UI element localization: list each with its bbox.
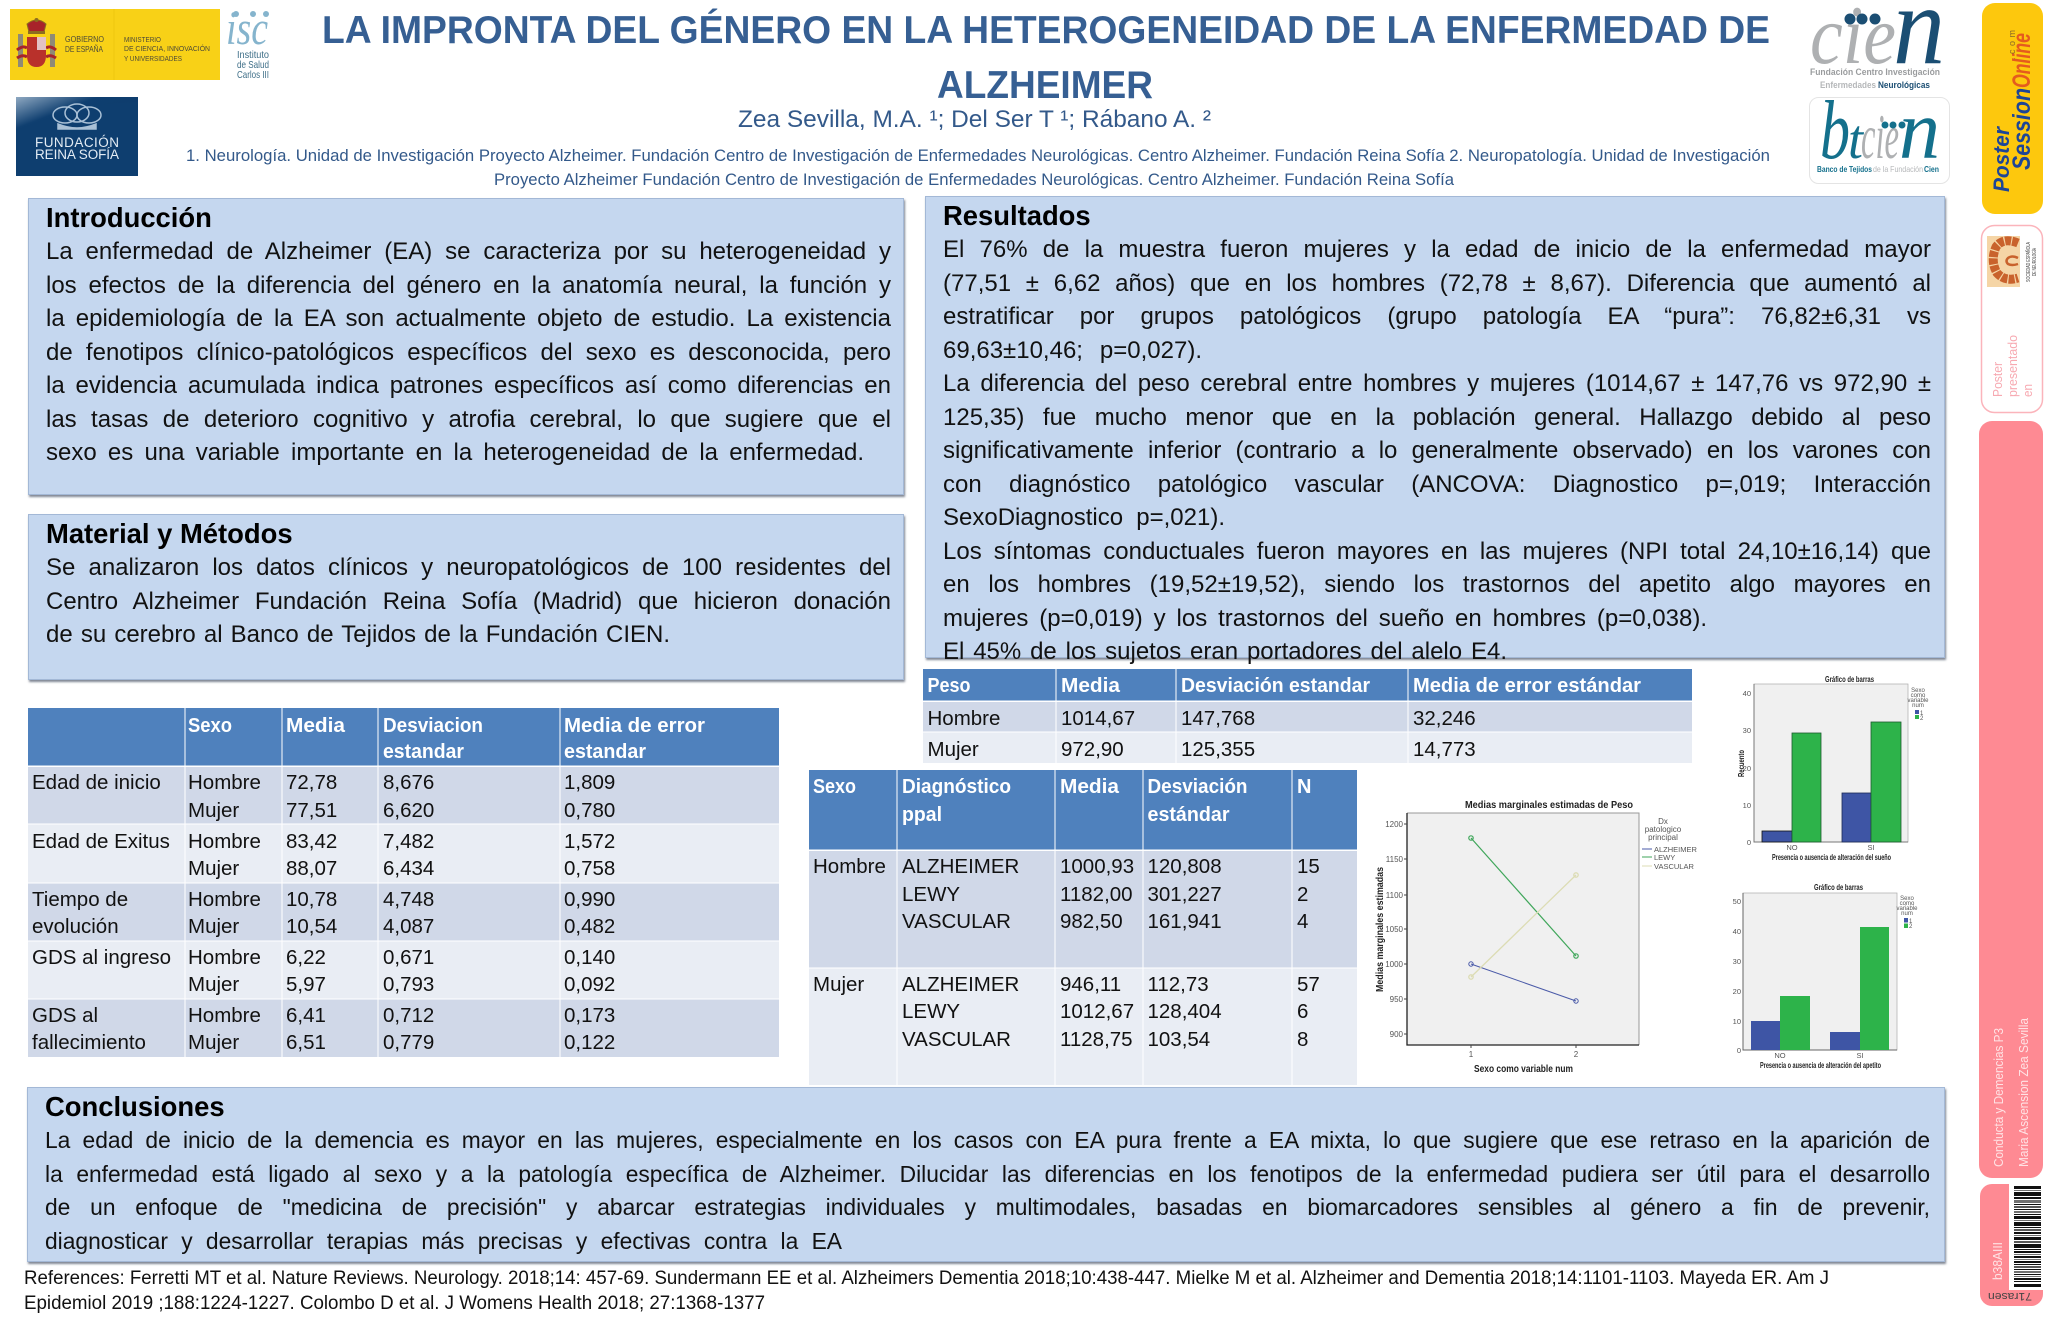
table: brain weight by sex: 32,246 [1413,707,1476,730]
sidebar: Poster presentado en: DE NEUROLOGÍA [2031,248,2038,276]
table: brain weight by sex and pathological diagnosis: 4 [1297,910,1308,933]
logo: Fundación Reina Sofía [16,97,138,176]
affiliations: 1. Neurología. Unidad de Investigación Proyecto Alzheimer. Fundación Centro de Investigación de Enfermedades Neurológicas. Centro Alzheimer. Fundación Reina Sofía 2. Neuropatología. Unidad de Investigación [186,147,1770,165]
legend: Sexo [1900,896,1914,902]
bar chart: appetite disturbance by sex: 50 [1733,897,1741,906]
text block: Introducción [46,238,891,466]
bar chart: sleep disturbance by sex [1737,675,1929,862]
line chart: estimated marginal means of brain weight: 1100 [1386,891,1404,900]
logo: Banco de Tejidos btcien: t [1848,109,1864,171]
bar chart: sleep disturbance by sex: Recuento [1737,750,1746,777]
legend: Dx [1658,817,1668,826]
bar chart: appetite disturbance by sex [1733,883,1918,1070]
table: brain weight by sex and pathological diagnosis: LEWY [902,1000,960,1023]
table: brain weight by sex and pathological diagnosis: VASCULAR [902,1028,1011,1051]
text block: Introducción: la epidemiología de la EA son actualmente objeto de estudio. La existencia [46,305,891,332]
line chart: estimated marginal means of brain weight: Sexo como variable num [1474,1064,1573,1075]
logo: Banco de Tejidos btcien [1810,84,1950,184]
legend: 2 [1909,924,1913,930]
table: brain weight by sex and pathological diagnosis: 15 [1297,855,1320,878]
table: brain weight by sex and pathological diagnosis: 128,404 [1148,1000,1222,1023]
legend: como [1900,901,1915,907]
logo: Banco de Tejidos btcien: Cien [1924,164,1939,174]
legend [1896,896,1918,930]
line chart: estimated marginal means of brain weight: 900 [1390,1030,1404,1039]
table: demographic and clinical variables by sex: Mujer [188,799,239,822]
table: demographic and clinical variables by sex: 0,122 [564,1031,615,1054]
table: brain weight by sex and pathological diagnosis: 1000,93 [1060,855,1134,878]
title: LA IMPRONTA DEL GÉNERO EN LA HETEROGENEIDAD DE LA ENFERMEDAD DE [322,8,1770,52]
table: demographic and clinical variables by sex: 4,748 [383,888,434,911]
table: brain weight by sex: Desviación estandar [1181,675,1370,697]
legend: num [1912,703,1924,709]
sidebar: Poster presentado en: Poster [1990,361,2005,397]
table: brain weight by sex and pathological diagnosis: 1128,75 [1060,1028,1133,1051]
table: brain weight by sex: Hombre [928,707,1000,730]
table: demographic and clinical variables by sex: Mujer [188,857,239,880]
barcode [2014,1186,2041,1287]
table: demographic and clinical variables by sex: Hombre [188,830,261,853]
text block: Resultados: significativamente inferior (contrario a lo generalmente observado) en los varones con [943,437,1931,464]
table: brain weight by sex and pathological diagnosis: estándar [1148,804,1230,826]
table: demographic and clinical variables by sex: Hombre [188,888,261,911]
text block: Conclusiones: la enfermedad está ligado al sexo y a la patología específica de Alzheimer. Dilucidar las diferencias en los fenotipos de la enfermedad pudiera ser útil para el desarrollo [45,1161,1930,1187]
text block: Resultados: La diferencia del peso cerebral entre hombres y mujeres (1014,67 ± 147,76 vs 972,90 ± [943,370,1931,397]
table: demographic and clinical variables by sex: Sexo [188,715,232,737]
references [24,1268,1829,1314]
heading: Material y Métodos: Material y Métodos [46,518,293,548]
panel: Conclusiones [27,1087,1945,1262]
logo: Fundación CIEN: Neurológicas [1878,80,1930,91]
legend: LEWY [1654,853,1675,862]
legend: Sexo [1911,688,1925,694]
table: demographic and clinical variables by sex: fallecimiento [32,1031,146,1054]
bar chart: sleep disturbance by sex: 10 [1743,801,1751,810]
bar chart: appetite disturbance by sex: 10 [1733,1017,1741,1026]
table: brain weight by sex and pathological diagnosis: 301,227 [1148,883,1222,906]
table: brain weight by sex and pathological diagnosis: Diagnóstico [902,776,1011,798]
panel: Resultados [925,196,1945,658]
table: demographic and clinical variables by sex: 10,78 [286,888,337,911]
text block: Conclusiones: de un enfoque de "medicina de precisión" y abarcar estrategias individuales y multimodales, basadas en biomarcadores sensibles al género a fin de prevenir, [45,1194,1930,1220]
line chart: estimated marginal means of brain weight: 1000 [1385,960,1404,969]
bar chart: sleep disturbance by sex: 30 [1743,726,1751,735]
table: brain weight by sex and pathological diagnosis: 6 [1297,1000,1308,1023]
table: demographic and clinical variables by sex: 5,97 [286,973,326,996]
icon: crown [53,104,101,129]
table: brain weight by sex: 1014,67 [1061,707,1135,730]
heading: Introducción: Introducción [46,202,212,232]
legend: variable [1896,906,1918,912]
table: brain weight by sex and pathological diagnosis: 946,11 [1060,973,1121,996]
table: demographic and clinical variables by sex: 0,173 [564,1004,615,1027]
table: demographic and clinical variables by sex: 88,07 [286,857,337,880]
series: Lewy [1469,836,1578,958]
legend: VASCULAR [1654,862,1694,871]
table: demographic and clinical variables by sex: Hombre [188,771,261,794]
bar chart: appetite disturbance by sex: SI [1856,1051,1864,1060]
table: demographic and clinical variables by sex: Edad de inicio [32,771,161,794]
table: demographic and clinical variables by sex: Mujer [188,1031,239,1054]
table: demographic and clinical variables by sex: Hombre [188,1004,261,1027]
legend: 1 [1909,919,1913,925]
table: demographic and clinical variables by sex [28,708,779,1057]
table: brain weight by sex: Media de error estándar [1413,675,1641,697]
table: demographic and clinical variables by sex: GDS al ingreso [32,946,171,969]
panel: Introducción [28,198,904,495]
table: demographic and clinical variables by sex: 1,572 [564,830,615,853]
table: demographic and clinical variables by sex: 83,42 [286,830,337,853]
table: brain weight by sex and pathological diagnosis: Sexo [813,776,856,798]
table: brain weight by sex and pathological diagnosis [809,770,1357,1085]
table: demographic and clinical variables by sex: 10,54 [286,915,337,938]
legend: 2 [1920,716,1924,722]
table: demographic and clinical variables by sex: Tiempo de [32,888,128,911]
bar chart: sleep disturbance by sex: 40 [1743,689,1751,698]
logo: Gobierno de España, Ministerio: MINISTERIO [124,35,161,44]
sidebar: session and author tab: Maria Ascension Zea Sevilla [2016,1017,2031,1167]
table: brain weight by sex and pathological diagnosis: Hombre [813,855,886,878]
logo: Fundación Reina Sofía: FUNDACIÓN [35,135,119,150]
sidebar: Poster presentado en: SOCIEDAD ESPAÑOLA [2025,242,2032,282]
table: demographic and clinical variables by sex: 7,482 [383,830,434,853]
logo: Banco de Tejidos btcien: b [1820,84,1850,177]
line chart: estimated marginal means of brain weight: 950 [1390,995,1404,1004]
bar chart: sleep disturbance by sex: NO [1786,843,1798,852]
text block: Resultados: SexoDiagnostico p=,021). [943,504,1225,531]
text block: Material y Métodos: de su cerebro al Banco de Tejidos de la Fundación CIEN. [46,621,670,648]
bar chart: sleep disturbance by sex: 20 [1743,764,1751,773]
table: brain weight by sex and pathological diagnosis: VASCULAR [902,910,1011,933]
heading: Resultados: Resultados [943,200,1091,230]
table: demographic and clinical variables by sex: 0,140 [564,946,615,969]
table: demographic and clinical variables by sex: 0,793 [383,973,434,996]
logo: Gobierno de España, Ministerio: Y UNIVERSIDADES [124,54,182,63]
table: brain weight by sex and pathological diagnosis: Media [1060,776,1120,798]
line chart: estimated marginal means of brain weight: 1150 [1386,855,1404,864]
bar chart: sleep disturbance by sex: Gráfico de barras [1825,675,1874,684]
sidebar: PosterSessionOnline badge: Poster [1989,126,2014,192]
sidebar: barcode tab [1980,1184,2043,1306]
legend: 1 [1920,711,1924,717]
table: brain weight by sex and pathological diagnosis: 8 [1297,1028,1308,1051]
authors: Zea Sevilla, M.A. ¹; Del Ser T ¹; Rábano A. ² [738,106,1211,133]
table: demographic and clinical variables by sex: 0,990 [564,888,615,911]
sidebar: PosterSessionOnline badge: Session [2008,88,2036,170]
table: brain weight by sex and pathological diagnosis: 1182,00 [1060,883,1133,906]
text block: Resultados: El 76% de la muestra fueron mujeres y la edad de inicio de la enfermedad mayor [943,236,1931,263]
table: demographic and clinical variables by sex: 0,482 [564,915,615,938]
table: brain weight by sex: Mujer [928,738,979,761]
table: brain weight by sex and pathological diagnosis: ALZHEIMER [902,855,1019,878]
table: brain weight by sex: 125,355 [1181,738,1255,761]
sidebar: Poster presentado en: en [2020,384,2035,397]
bar chart: sleep disturbance by sex: SI [1867,843,1875,852]
table: brain weight by sex and pathological diagnosis: Mujer [813,973,864,996]
bar chart: sleep disturbance by sex: 0 [1747,838,1751,847]
table: demographic and clinical variables by sex: Mujer [188,973,239,996]
references: Epidemiol 2019 ;188:1224-1227. Colombo D et al. J Womens Health 2018; 27:1368-1377 [24,1293,765,1314]
text block: Resultados: mujeres (p=0,019) y los trastornos del sueño en hombres (p=0,038). [943,604,1707,632]
text block: Resultados: (77,51 ± 6,62 años) que en los hombres (72,78 ± 8,67). Diferencia que aumentó al [943,270,1931,296]
logo: Banco de Tejidos btcien: Banco de Tejidos [1817,164,1872,174]
text block: Introducción: de fenotipos clínico-patológicos específicos del sexo es desconocida, pero [46,338,891,366]
text block: Resultados: 69,63±10,46; p=0,027). [943,336,1202,364]
bar chart: appetite disturbance by sex: Presencia o ausencia de alteración del apetito [1760,1061,1881,1070]
series: Alzheimer [1469,962,1578,1003]
logo: Banco de Tejidos btcien: de la Fundación [1873,164,1923,174]
table: demographic and clinical variables by sex: 0,758 [564,857,615,880]
text block: Introducción: la evidencia acumulada indica patrones específicos así como diferencias en [46,372,891,399]
table: brain weight by sex: 972,90 [1061,738,1124,761]
table: demographic and clinical variables by sex: Hombre [188,946,261,969]
sidebar: Poster presentado en [1982,226,2042,412]
affiliations: Proyecto Alzheimer Fundación Centro de Investigación de Enfermedades Neurológicas. Centro Alzheimer. Fundación Reina Sofía [494,171,1455,189]
table: brain weight by sex: Peso [928,675,970,697]
legend [1642,817,1698,871]
sidebar: barcode tab: 71rasen [1988,1290,2032,1302]
text block: Material y Métodos [46,554,891,648]
table: brain weight by sex and pathological diagnosis: 112,73 [1148,973,1209,996]
text block: Conclusiones: La edad de inicio de la demencia es mayor en las mujeres, especialmente en los casos con EA pura frente a EA mixta, lo que sugiere que ese retraso en la aparición de [45,1127,1930,1153]
text block: Resultados: en los hombres (19,52±19,52), siendo los trastornos del apetito algo mayores en [943,571,1931,598]
line chart: estimated marginal means of brain weight: 1050 [1385,925,1404,934]
table: brain weight by sex and pathological diagnosis: 1012,67 [1060,1000,1134,1023]
table: brain weight by sex: 147,768 [1181,707,1255,730]
text block: Resultados: El 45% de los sujetos eran portadores del alelo E4. [943,638,1507,665]
logo: Instituto de Salud Carlos III: Carlos III [237,69,269,81]
text block: Resultados [943,236,1931,665]
legend: principal [1648,833,1678,842]
table: demographic and clinical variables by sex: Media de error [564,715,705,737]
panel: Material y Métodos [28,514,904,680]
table: demographic and clinical variables by sex: 77,51 [286,799,337,822]
table: demographic and clinical variables by sex: GDS al [32,1004,98,1027]
table: demographic and clinical variables by sex: 4,087 [383,915,434,938]
title [322,8,1770,107]
logo: Banco de Tejidos btcien: cie [1861,101,1899,172]
sidebar: session and author tab [1979,421,2043,1178]
sidebar: session and author tab: Conducta y Demencias P3 [1991,1028,2006,1167]
icon: brain logo [1987,236,2020,287]
text block: Conclusiones [45,1127,1930,1254]
title: ALZHEIMER [937,64,1153,107]
table: brain weight by sex: Media [1061,675,1121,697]
bar chart: sleep disturbance by sex: Presencia o ausencia de alteración del sueño [1772,853,1891,862]
logo: Banco de Tejidos btcien: n [1899,84,1940,177]
line chart: estimated marginal means of brain weight: Medias marginales estimadas de Peso [1465,800,1633,811]
table: brain weight by sex and pathological diagnosis: 57 [1297,973,1320,996]
text block: Material y Métodos: Centro Alzheimer Fundación Reina Sofía (Madrid) que hicieron donación [46,588,891,614]
table: demographic and clinical variables by sex: 6,41 [286,1004,326,1027]
table: demographic and clinical variables by sex: 0,780 [564,799,615,822]
text block: Introducción: sexo es una variable importante en la heterogeneidad de la enfermedad. [46,439,864,466]
text block: Resultados: Los síntomas conductuales fueron mayores en las mujeres (NPI total 24,10±16,14) que [943,538,1931,564]
logo: Fundación Reina Sofía: REINA SOFÍA [35,147,119,162]
legend: patologico [1645,825,1682,834]
logo: Gobierno de España, Ministerio: DE ESPAÑA [65,45,104,54]
text block: Material y Métodos: Se analizaron los datos clínicos y neuropatológicos de 100 residentes del [46,554,891,581]
table: demographic and clinical variables by sex: Media [286,715,346,737]
table: brain weight by sex and pathological diagnosis: 2 [1297,883,1308,906]
text block: Introducción: las tasas de deterioro cognitivo y atrofia cerebral, lo que sugiere que el [46,406,891,432]
table: demographic and clinical variables by sex: evolución [32,915,119,938]
legend: como [1911,693,1926,699]
logo: Fundación CIEN: Enfermedades [1820,80,1876,91]
table: brain weight by sex and pathological diagnosis: 103,54 [1148,1028,1210,1051]
text block: Resultados: con diagnóstico patológico vascular (ANCOVA: Diagnostico p=,019; Interacción [943,470,1931,498]
table: demographic and clinical variables by sex: Desviacion [383,715,483,737]
table: demographic and clinical variables by sex: 0,712 [383,1004,434,1027]
legend: ALZHEIMER [1654,845,1698,854]
bar chart: appetite disturbance by sex: 30 [1733,957,1741,966]
legend: num [1901,911,1913,917]
table: brain weight by sex [923,669,1692,763]
references: References: Ferretti MT et al. Nature Reviews. Neurology. 2018;14: 457-69. Sundermann EE et al. Alzheimers Dementia 2018;10:438-447. Mielke M et al. Alzheimer and Dementia 2018;14:1101-1103. Mayeda ER. Am J [24,1268,1829,1289]
sidebar: PosterSessionOnline badge: .com [2007,30,2017,60]
table: brain weight by sex and pathological diagnosis: ppal [902,804,942,826]
table: demographic and clinical variables by sex: 6,434 [383,857,434,880]
table: demographic and clinical variables by sex: 72,78 [286,771,337,794]
affiliations [186,147,1770,189]
line chart: estimated marginal means of brain weight: 1 [1469,1050,1474,1059]
text block: Introducción: los efectos de la diferencia del género en la anatomía neural, la función y [46,272,891,298]
bar chart: appetite disturbance by sex: 20 [1733,987,1741,996]
heading: Conclusiones: Conclusiones [45,1090,225,1122]
sidebar: Poster presentado en: presentado [2005,335,2020,397]
logo: Gobierno de España, Ministerio: GOBIERNO [65,35,104,44]
icon: coat of arms [17,18,56,67]
table: demographic and clinical variables by sex: estandar [383,741,464,763]
table: brain weight by sex: 14,773 [1413,738,1476,761]
text block: Resultados: estratificar por grupos patológicos (grupo patología EA “pura”: 76,82±6,31 vs [943,303,1931,330]
table: demographic and clinical variables by sex: 0,779 [383,1031,434,1054]
table: brain weight by sex and pathological diagnosis: 120,808 [1148,855,1222,878]
logo: Instituto de Salud Carlos III: isc [226,2,268,55]
table: demographic and clinical variables by sex: Mujer [188,915,239,938]
table: demographic and clinical variables by sex: 0,671 [383,946,434,969]
table: demographic and clinical variables by sex: estandar [564,741,646,763]
table: brain weight by sex and pathological diagnosis: Desviación [1148,776,1248,798]
text block: Resultados: 125,35) fue mucho menor que en la población general. Hallazgo debido al peso [943,404,1931,430]
text block: Introducción: La enfermedad de Alzheimer (EA) se caracteriza por su heterogeneidad y [46,238,891,265]
bar chart: appetite disturbance by sex: Gráfico de barras [1814,883,1863,892]
logo: Gobierno de España, Ministerio: DE CIENCIA, INNOVACIÓN [124,44,210,53]
legend: variable [1907,698,1929,704]
bar chart: appetite disturbance by sex: NO [1774,1051,1786,1060]
table: brain weight by sex and pathological diagnosis: LEWY [902,883,960,906]
line chart: estimated marginal means of brain weight [1375,800,1698,1075]
table: brain weight by sex and pathological diagnosis: 982,50 [1060,910,1123,933]
logo: Instituto de Salud Carlos III [226,2,269,81]
table: brain weight by sex and pathological diagnosis: ALZHEIMER [902,973,1019,996]
table: demographic and clinical variables by sex: 6,22 [286,946,326,969]
bar chart: appetite disturbance by sex: 0 [1737,1046,1741,1055]
logo: Fundación CIEN: Fundación Centro Investigación [1810,67,1940,78]
text block: Conclusiones: diagnosticar y desarrollar terapias más precisas y efectivas contra la EA [45,1228,842,1254]
series: Vascular [1469,873,1578,979]
legend [1907,688,1929,722]
table: demographic and clinical variables by sex: 6,51 [286,1031,326,1054]
table: demographic and clinical variables by sex: Edad de Exitus [32,830,170,853]
table: demographic and clinical variables by sex: 8,676 [383,771,434,794]
logo: Instituto de Salud Carlos III: Instituto [237,49,269,61]
table: brain weight by sex and pathological diagnosis: 161,941 [1148,910,1222,933]
logo: Gobierno de España, Ministerio [10,9,220,80]
sidebar: PosterSessionOnline badge [1982,3,2043,214]
table: demographic and clinical variables by sex: 1,809 [564,771,615,794]
line chart: estimated marginal means of brain weight: Medias marginales estimadas [1375,867,1386,992]
sidebar: barcode tab: b38AIII [1990,1242,2005,1280]
line chart: estimated marginal means of brain weight: 2 [1574,1050,1579,1059]
sidebar: PosterSessionOnline badge: Online [2008,33,2036,88]
logo: Instituto de Salud Carlos III: de Salud [237,59,269,71]
bar chart: appetite disturbance by sex: 40 [1733,927,1741,936]
table: demographic and clinical variables by sex: 6,620 [383,799,434,822]
table: brain weight by sex and pathological diagnosis: N [1297,776,1311,798]
line chart: estimated marginal means of brain weight: 1200 [1385,820,1404,829]
logo: Fundación CIEN [1810,0,1945,91]
table: demographic and clinical variables by sex: 0,092 [564,973,615,996]
